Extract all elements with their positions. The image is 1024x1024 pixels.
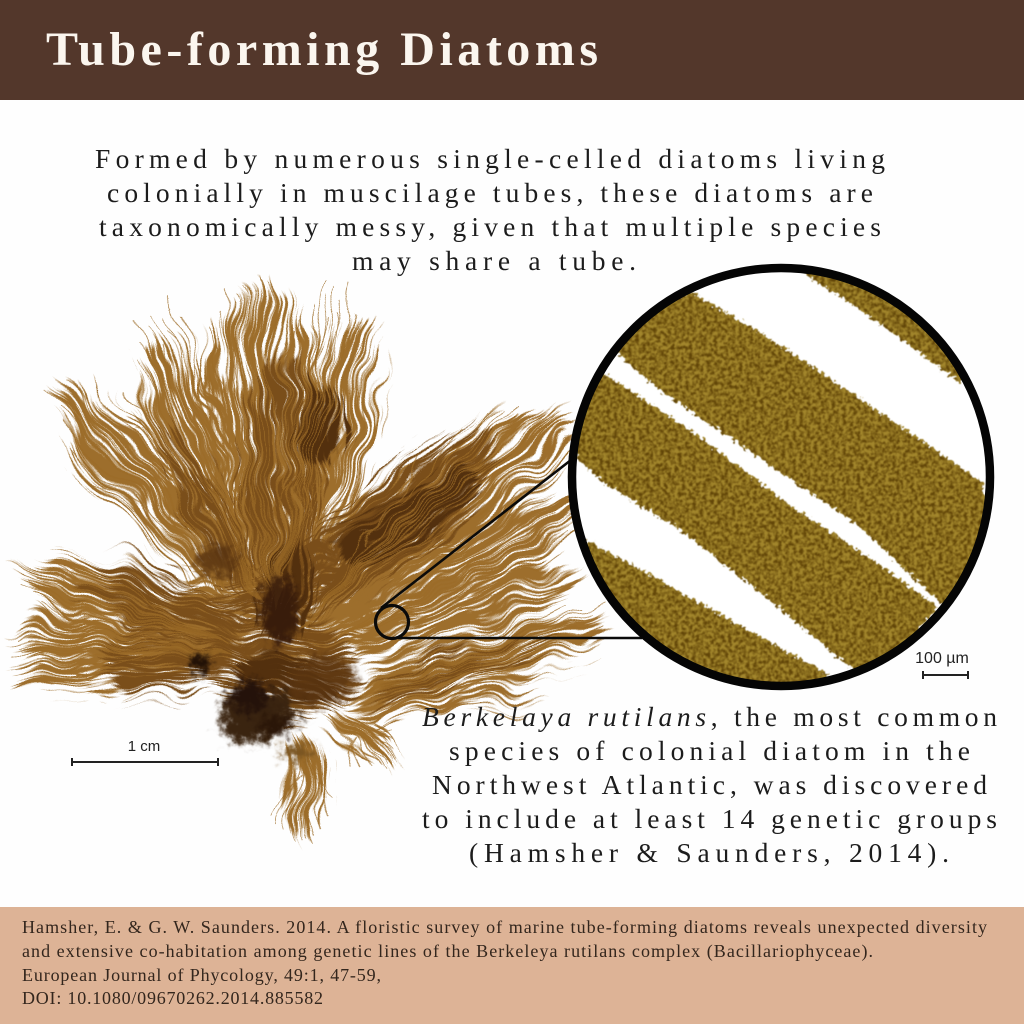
citation text: European Journal of Phycology, 49:1, 47-59,	[22, 965, 381, 985]
species text block: (Hamsher & Saunders, 2014).	[469, 837, 949, 868]
intro text block: taxonomically messy, given that multiple species	[99, 211, 881, 242]
small selection circle	[376, 606, 408, 638]
species text block: Northwest Atlantic, was discovered	[432, 769, 987, 800]
scale bar: 100 micrometres: 100 µm	[915, 650, 969, 667]
streaky colony tufts	[0, 272, 627, 848]
intro text block: may share a tube.	[352, 245, 636, 276]
citation text: and extensive co-habitation among genetic lines of the Berkeleya rutilans complex (Bacillariophyceae).	[22, 941, 873, 962]
scale bar: 100 micrometres	[915, 650, 969, 679]
citation text: Hamsher, E. & G. W. Saunders. 2014. A floristic survey of marine tube-forming diatoms reveals unexpected diversity	[22, 917, 987, 937]
citation text: DOI: 10.1080/09670262.2014.885582	[22, 988, 323, 1008]
species text block: Berkelaya rutilans, the most common	[422, 701, 997, 732]
citation text	[22, 917, 987, 1008]
species text block	[422, 701, 997, 868]
centre filler	[153, 549, 385, 679]
dark central clumps and holdfast	[189, 543, 356, 760]
scale bar: 1 cm: 1 cm	[128, 738, 160, 755]
dark tufts	[224, 378, 491, 719]
zoom connector lines	[381, 460, 642, 638]
species text block: to include at least 14 genetic groups	[422, 803, 997, 834]
citation footer	[0, 907, 1024, 1024]
intro text block	[95, 143, 885, 276]
intro text block: colonially in muscilage tubes, these diatoms are	[107, 177, 873, 208]
specimen photo: tube-forming diatom colony	[0, 272, 627, 848]
title banner	[0, 0, 1024, 100]
lens ring	[572, 268, 990, 686]
scale bar: 1 cm	[72, 738, 218, 766]
intro text block: Formed by numerous single-celled diatoms living	[95, 143, 885, 174]
light tufts	[0, 283, 627, 848]
title: Tube-forming Diatoms	[46, 23, 598, 76]
loose thin strands	[8, 272, 616, 844]
colony tubes under magnification	[577, 274, 986, 682]
mid tufts	[69, 353, 564, 729]
species text block: species of colonial diatom in the	[449, 735, 970, 766]
magnified view circle	[560, 240, 1000, 710]
